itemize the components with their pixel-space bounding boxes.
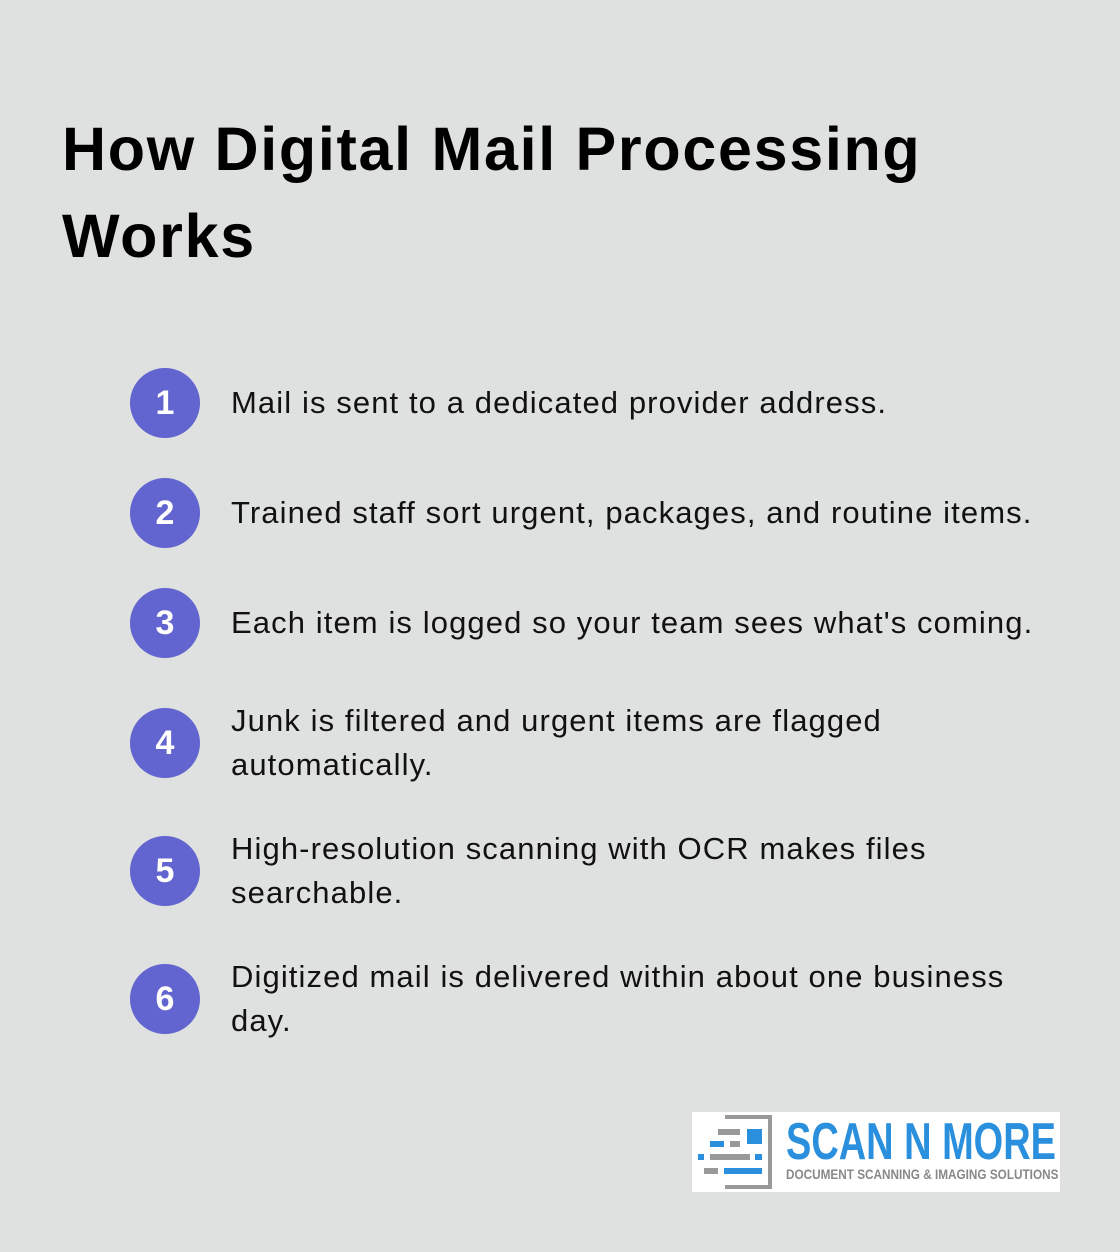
step 3 xyxy=(130,588,1033,658)
title: How Digital Mail Processing xyxy=(62,115,921,183)
step 3: 3 xyxy=(156,604,174,642)
step 1 xyxy=(130,368,887,438)
step 5: searchable. xyxy=(231,875,403,910)
step 1: 1 xyxy=(156,384,174,422)
step 3: Each item is logged so your team sees what's coming. xyxy=(231,605,1033,640)
title: Works xyxy=(62,202,256,270)
step 5: 5 xyxy=(156,852,174,890)
step 4: 4 xyxy=(156,724,174,762)
step 2: 2 xyxy=(156,494,174,532)
step 6: 6 xyxy=(156,980,174,1018)
step 2: Trained staff sort urgent, packages, and routine items. xyxy=(231,495,1032,530)
step 4 xyxy=(130,703,882,782)
step 5 xyxy=(130,831,927,910)
step 4: automatically. xyxy=(231,747,434,782)
step 6: Digitized mail is delivered within about one business xyxy=(231,959,1004,994)
logo text: SCAN N MORE xyxy=(786,1113,1056,1171)
title xyxy=(62,115,921,270)
step 6 xyxy=(130,959,1004,1038)
logo: DOCUMENT SCANNING & IMAGING SOLUTIONS xyxy=(786,1166,1058,1182)
step 4: Junk is filtered and urgent items are flagged xyxy=(231,703,882,738)
step 2 xyxy=(130,478,1032,548)
step 1: Mail is sent to a dedicated provider address. xyxy=(231,385,887,420)
icon: scanner blocks xyxy=(698,1115,772,1189)
logo xyxy=(692,1112,1060,1192)
step 5: High-resolution scanning with OCR makes files xyxy=(231,831,927,866)
step 6: day. xyxy=(231,1003,292,1038)
